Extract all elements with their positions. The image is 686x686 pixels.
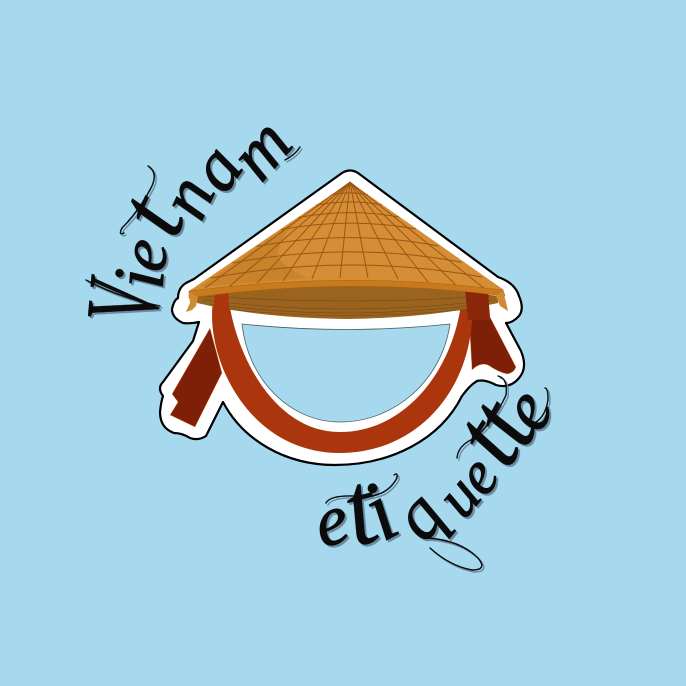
- cone concentric rings: [211, 193, 482, 278]
- title: etiquette: [305, 376, 569, 570]
- title: etiquette: i: [346, 463, 412, 559]
- brim tab left: [186, 292, 198, 312]
- chin strap: [212, 292, 472, 453]
- title: etiquette: e: [305, 477, 357, 563]
- cone radial ribs: [205, 182, 485, 289]
- title: etiquette: q: [376, 475, 460, 554]
- title: etiquette: u: [422, 462, 494, 530]
- title: Vietnam: [63, 103, 307, 328]
- hat cone: [189, 182, 504, 291]
- title: Vietnam: n: [143, 163, 231, 230]
- sticker backing: [160, 170, 524, 465]
- title: Vietnam: i: [98, 266, 180, 291]
- right strap tail: [468, 298, 516, 374]
- strap opening: [242, 324, 450, 422]
- title: etiquette: e: [441, 445, 513, 506]
- title: Vietnam: t: [94, 177, 207, 251]
- title: Vietnam: m: [213, 103, 307, 195]
- brim tab right: [496, 291, 508, 311]
- title: etiquette: t: [427, 395, 543, 484]
- title: Vietnam: a: [172, 130, 259, 205]
- title flourishes: [326, 474, 397, 503]
- left strap tail: [170, 328, 222, 427]
- strap over underside: [213, 290, 230, 322]
- title: Vietnam: V: [63, 272, 183, 328]
- title: etiquette: t: [330, 448, 391, 569]
- sticker: conical hat and strap: [160, 170, 524, 465]
- hat brim: [189, 280, 505, 298]
- title: etiquette: e: [483, 378, 569, 441]
- title: Vietnam: e: [103, 232, 183, 277]
- title flourishes: [120, 166, 154, 234]
- hat underside: [197, 284, 498, 319]
- title: etiquette: t: [442, 379, 560, 462]
